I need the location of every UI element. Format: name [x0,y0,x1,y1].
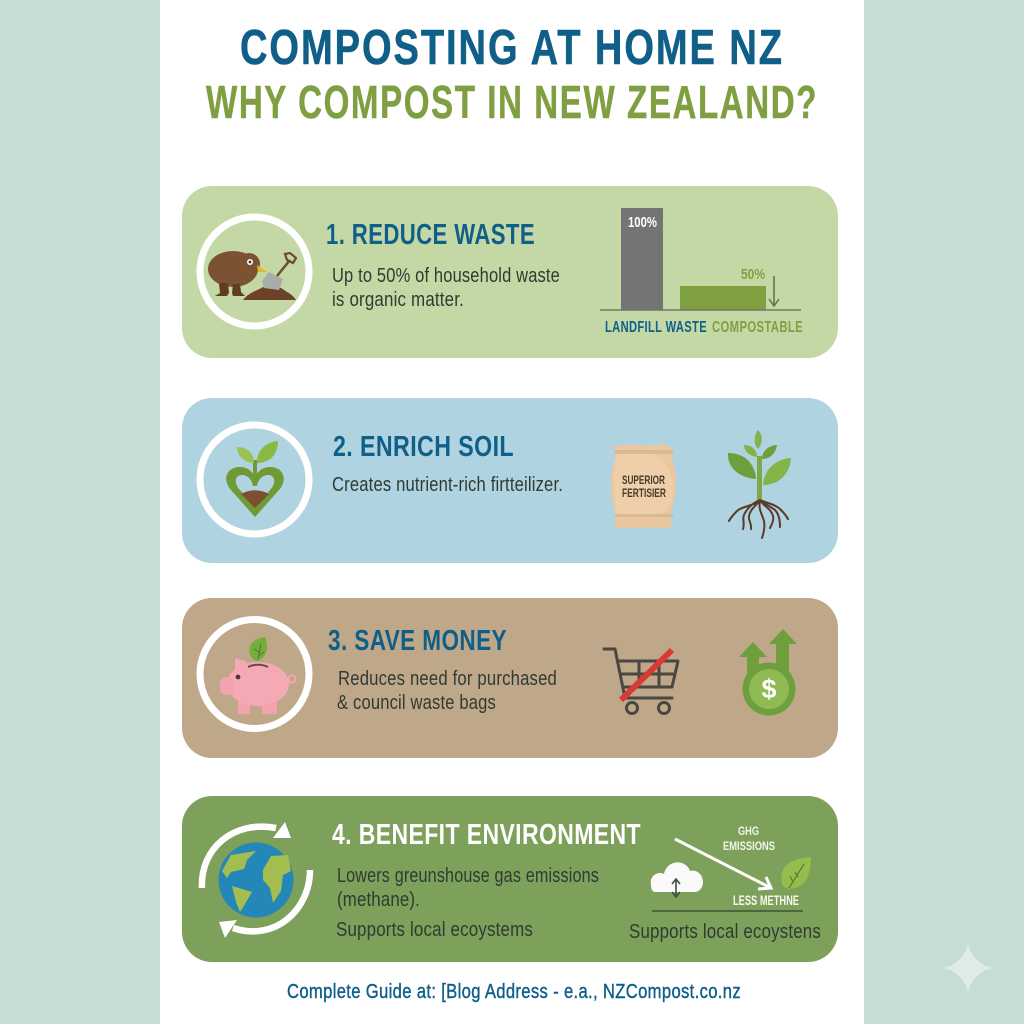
panel: enrich soil [182,398,838,563]
text: save money body: & council waste bags [337,692,496,714]
text: reduce waste body: is organic matter. [332,289,464,311]
panel: reduce waste [182,186,838,358]
icon: piggy bank [200,620,309,728]
text: enrich soil body: Creates nutrient-rich firtteilizer. [332,474,563,496]
text: environment body: (methane). [337,889,420,911]
bar chart: landfill vs compostable: LANDFILL WASTE [605,319,707,336]
heading: enrich soil: 2. ENRICH SOIL [333,431,514,463]
panel: benefit environment [182,796,838,962]
text: save money body: Reduces need for purchased [338,668,557,690]
panel: save money [182,598,838,758]
icon: heart with sprout [200,425,309,534]
icon: dollar coin with rising arrows: $ [761,674,777,704]
text: save money body [337,668,557,714]
icon: fertiliser bag: FERTISIER [622,486,666,500]
text: reduce waste body [332,265,560,311]
heading: reduce waste: 1. REDUCE WASTE [326,219,535,251]
icon: kiwi digging compost [200,217,309,326]
chart: GHG emissions falling: EMISSIONS [723,839,775,853]
bar chart: landfill vs compostable [600,208,803,336]
title: COMPOSTING AT HOME NZ [240,21,784,75]
icon: globe with cycle arrows [202,822,310,938]
text: reduce waste body: Up to 50% of household waste [332,265,560,287]
bar chart: landfill vs compostable: COMPOSTABLE [712,319,803,336]
chart: GHG emissions falling [629,824,821,943]
icon: dollar coin with rising arrows [739,629,797,716]
chart: GHG emissions falling: LESS METHNE [733,893,799,908]
bar chart: landfill vs compostable: 100% [628,215,657,231]
text: environment body: Supports local ecoystems [336,919,533,941]
heading: benefit environment: 4. BENEFIT ENVIRONMENT [332,819,641,851]
icon: fertiliser bag: SUPERIOR [622,473,665,487]
text: environment body: Lowers greunshouse gas emissions [337,865,599,887]
footer: Complete Guide at: [Blog Address - e.a., NZCompost.co.nz [287,981,741,1003]
icon: sparkle [944,944,992,992]
icon: crossed-out shopping cart [604,649,678,714]
bar chart: landfill vs compostable: 50% [741,267,765,283]
icon: fertiliser bag [611,444,676,529]
text: environment body [336,865,599,941]
chart: GHG emissions falling: GHG [738,824,759,838]
chart: GHG emissions falling: Supports local ecoystens [629,921,821,943]
icon: plant with roots [728,430,791,538]
heading: save money: 3. SAVE MONEY [328,625,507,657]
